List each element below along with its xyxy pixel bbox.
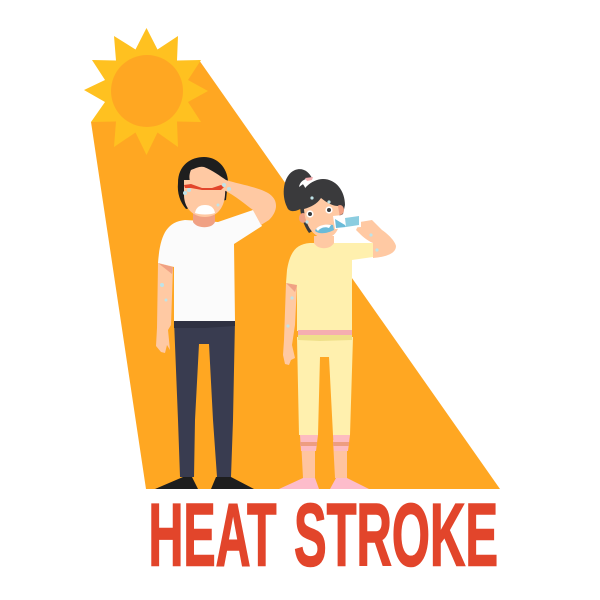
- woman sleeve skin shadow: [286, 283, 297, 292]
- woman hair: [300, 179, 345, 233]
- woman ponytail: [284, 169, 312, 211]
- woman raised arm: [356, 220, 396, 258]
- man neck: [193, 212, 215, 227]
- man open mouth: [195, 205, 215, 214]
- woman cuff bands: [300, 442, 349, 446]
- icon: sun: [84, 28, 208, 155]
- sun light beam: [91, 60, 500, 489]
- woman hair tie: [299, 177, 313, 187]
- woman left shoe: [279, 478, 319, 489]
- man figure: [155, 157, 276, 489]
- man face: [184, 180, 226, 217]
- sweat drops: [160, 183, 231, 302]
- woman pink waistband: [298, 330, 352, 335]
- woman face: [304, 198, 340, 238]
- water spilling from mouth: [315, 225, 334, 233]
- man trouser waistband: [174, 320, 235, 328]
- woman left ear: [299, 213, 307, 223]
- woman right ear: [336, 205, 344, 215]
- man right shoe: [211, 477, 254, 489]
- sweat drops: [286, 196, 379, 328]
- woman left arm: [283, 283, 297, 365]
- man sleeve skin shadow: [158, 263, 173, 274]
- man white shirt: [158, 210, 262, 321]
- man trousers: [174, 320, 235, 477]
- man red eyes: [184, 184, 224, 190]
- woman figure: [279, 169, 396, 489]
- title: [148, 485, 498, 585]
- man raised forearm: [189, 167, 276, 225]
- woman pant cuffs: [300, 435, 350, 451]
- woman leg skin: [301, 440, 347, 478]
- water bottle: [333, 213, 361, 229]
- man hair: [178, 157, 228, 209]
- woman shirt: [286, 243, 373, 331]
- man left arm: [156, 263, 173, 353]
- title: HEAT: [148, 485, 276, 585]
- woman neck: [314, 236, 334, 248]
- woman eyes: [306, 206, 333, 218]
- woman pants: [297, 337, 353, 435]
- woman right shoe: [330, 478, 369, 489]
- man left shoe: [155, 477, 198, 489]
- woman waist shadow: [298, 335, 352, 341]
